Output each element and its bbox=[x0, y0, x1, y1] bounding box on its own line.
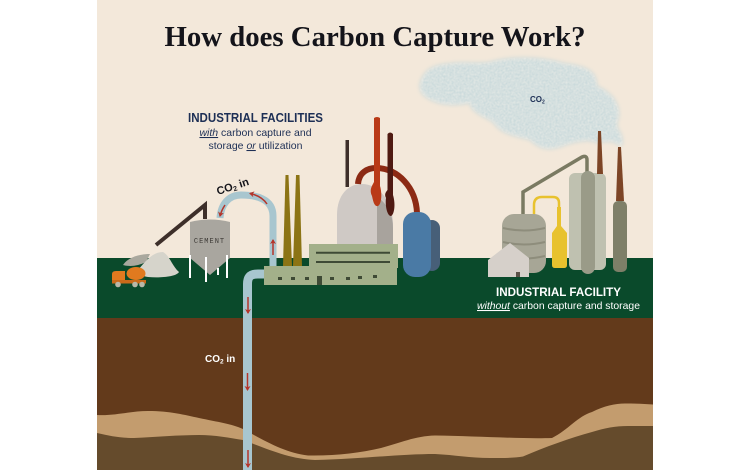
label: CO2 in on arch: in bbox=[235, 176, 251, 192]
icon: bright red stack bbox=[371, 117, 381, 206]
icon: blue tanks bbox=[403, 212, 440, 277]
icon: grey pipe bbox=[523, 156, 587, 214]
pipe underground bbox=[248, 274, 268, 470]
icon: yellow pipe bbox=[534, 197, 559, 216]
title: How does Carbon Capture Work? bbox=[164, 21, 586, 53]
icon: dome tank bbox=[337, 184, 393, 244]
label: CO2 in on arch: 2 bbox=[233, 185, 239, 193]
label: CO2 in on arch: CO bbox=[215, 181, 235, 198]
heading: industrial facilities with capture: with carbon capture and bbox=[199, 127, 312, 139]
heading: industrial facility without capture bbox=[477, 285, 640, 312]
icon: yellow bottle bbox=[552, 207, 567, 268]
heading: industrial facilities with capture: storage or utilization bbox=[208, 140, 303, 152]
icon: dark red stack bbox=[385, 132, 394, 216]
icon: red arched pipe bbox=[358, 168, 417, 213]
heading: industrial facility without capture: without carbon capture and storage bbox=[477, 300, 640, 312]
pipe red arrows bbox=[220, 194, 273, 467]
label: CO2 in underground: in bbox=[224, 354, 235, 365]
cloud label: 2 bbox=[542, 100, 545, 106]
icon: chimney with smoke bbox=[597, 131, 603, 174]
dark lower rock layer bbox=[97, 426, 653, 470]
icon: right chimney bbox=[613, 147, 627, 272]
label: CO2 in underground: CO bbox=[205, 354, 220, 365]
icon: cement silo bbox=[190, 220, 230, 282]
icon: tower bbox=[569, 171, 606, 274]
factory building bbox=[264, 244, 398, 285]
CO2 capture pipe to cement silo bbox=[220, 195, 273, 268]
icon: grey striped tank bbox=[502, 214, 546, 273]
heading: industrial facility without capture: INDUSTRIAL FACILITY bbox=[496, 285, 621, 299]
tan rock layer bbox=[97, 404, 653, 470]
icon: small house bbox=[488, 243, 529, 277]
icon: cement truck bbox=[112, 267, 146, 287]
cloud label: CO bbox=[530, 95, 542, 104]
background: sky bbox=[97, 0, 653, 259]
icon: chimneys bbox=[283, 175, 302, 266]
background: brown soil bbox=[97, 318, 653, 470]
icon: conveyor bbox=[156, 205, 205, 245]
icon: material pile bbox=[123, 252, 179, 277]
icon: thin stack bbox=[346, 140, 349, 187]
CO2 cloud bbox=[420, 58, 623, 149]
silo label: CEMENT bbox=[194, 238, 225, 246]
heading: industrial facilities with capture: INDUSTRIAL FACILITIES bbox=[188, 111, 323, 125]
label: CO2 in underground: 2 bbox=[220, 358, 224, 366]
background: green ground bbox=[97, 258, 653, 318]
heading: industrial facilities with capture bbox=[188, 111, 323, 152]
